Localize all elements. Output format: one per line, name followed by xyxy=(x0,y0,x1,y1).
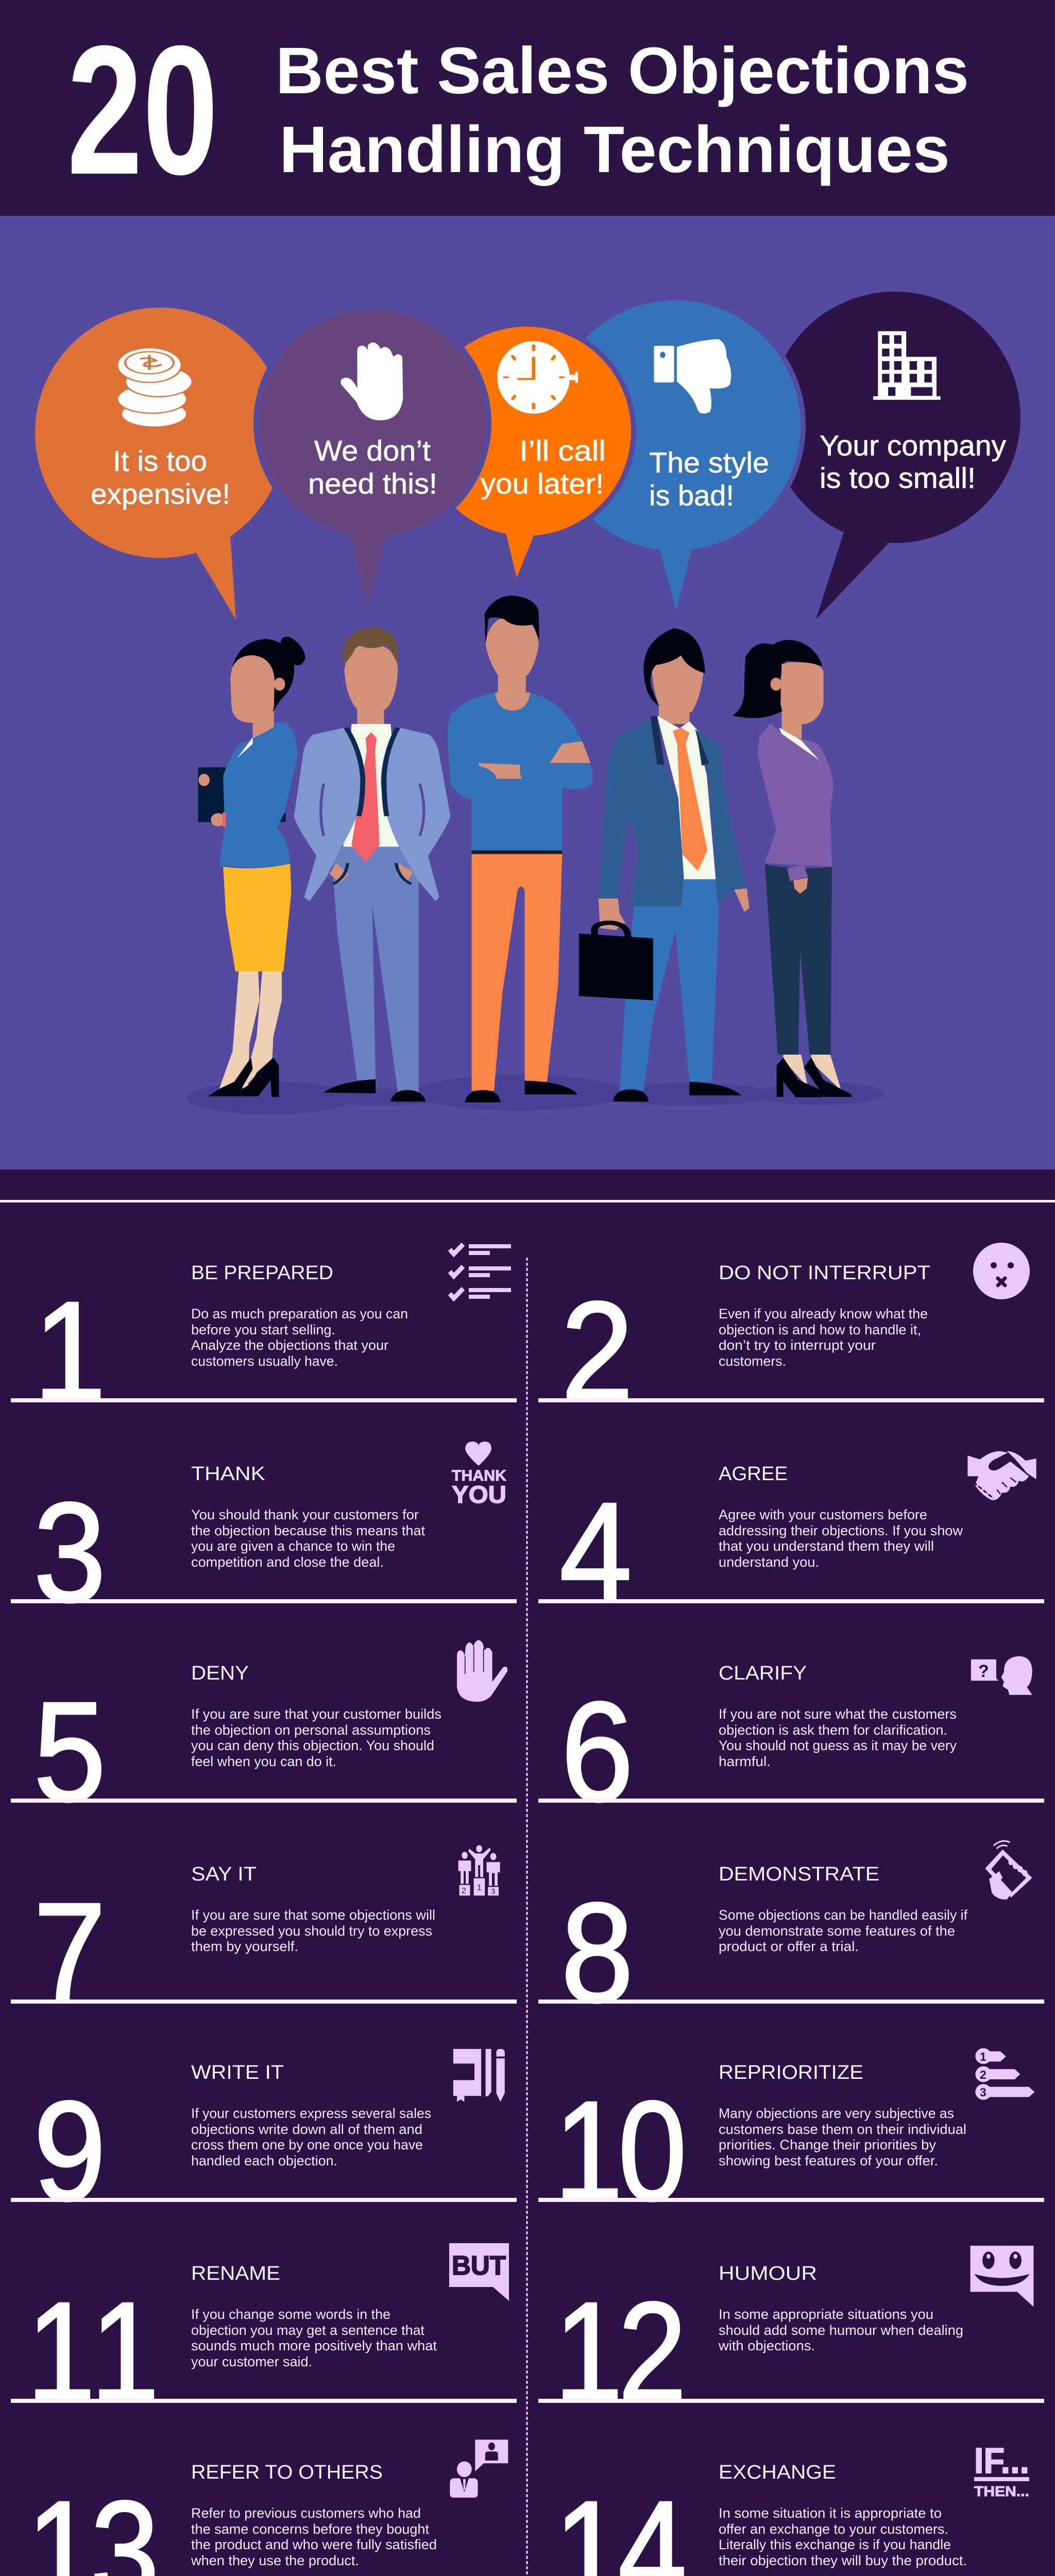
bubble text: you later! xyxy=(481,467,604,500)
icon: handshake xyxy=(967,1451,1036,1500)
body text: them by yourself. xyxy=(191,1939,298,1954)
bubble text: Your company xyxy=(820,429,1006,462)
heading: DO NOT INTERRUPT xyxy=(719,1262,930,1284)
icon: person with speech bubble xyxy=(450,2439,508,2498)
bubble text: We don’t xyxy=(314,434,431,467)
number 7: 7 xyxy=(33,1873,106,2031)
heading: DEMONSTRATE xyxy=(719,1863,879,1885)
body text xyxy=(719,1507,963,1570)
body text: Analyze the objections that your xyxy=(191,1337,388,1353)
icon: podium people: 2 xyxy=(462,1887,466,1895)
body text xyxy=(719,2505,967,2568)
body text: you can deny this objection. You should xyxy=(191,1738,434,1753)
body text: If you are sure that some objections will xyxy=(191,1907,435,1923)
body text: you demonstrate some features of the xyxy=(719,1923,955,1939)
number 1: 1 xyxy=(33,1272,106,1430)
item 2: do not interrupt xyxy=(538,1243,1044,1430)
number 11: 11 xyxy=(27,2273,159,2431)
icon: heart thank you xyxy=(452,1442,506,1508)
body text: your customer said. xyxy=(191,2354,312,2369)
body text: handled each objection. xyxy=(191,2153,337,2168)
body text: objection is ask them for clarification. xyxy=(719,1722,947,1738)
body text: If your customers express several sales xyxy=(191,2106,431,2121)
body text: should add some humour when dealing xyxy=(719,2323,963,2338)
body text: harmful. xyxy=(719,1754,771,1769)
icon: smiling speech bubble xyxy=(971,2246,1033,2307)
bubble text: expensive! xyxy=(91,478,230,510)
body text: If you change some words in the xyxy=(191,2307,390,2322)
item 6: clarify xyxy=(538,1656,1044,1831)
bubble: we don't need this xyxy=(253,304,491,606)
bubble text xyxy=(481,434,606,500)
icon: if then: IF... xyxy=(974,2441,1029,2481)
heading: HUMOUR xyxy=(719,2263,817,2284)
bubble: I'll call you later xyxy=(417,321,636,578)
body text: Literally this exchange is if you handle xyxy=(719,2537,951,2552)
body text xyxy=(191,2505,437,2568)
body text: offer an exchange to your customers. xyxy=(719,2521,948,2537)
body text: Many objections are very subjective as xyxy=(719,2106,954,2121)
number 5: 5 xyxy=(33,1672,106,1831)
number 9: 9 xyxy=(33,2072,106,2230)
item 1: be prepared xyxy=(11,1244,517,1430)
body text: addressing their objections. If you show xyxy=(719,1523,963,1538)
icon: ranked list: 3 xyxy=(980,2086,986,2099)
item 14: exchange xyxy=(538,2441,1044,2576)
person: man in light blue suit and red tie xyxy=(294,628,450,1101)
body text xyxy=(719,1706,957,1769)
icon: silent face xyxy=(973,1243,1030,1299)
icon: but speech bubble xyxy=(449,2243,509,2301)
icon: if then xyxy=(974,2441,1029,2499)
bubble text xyxy=(820,429,1006,494)
body text: the objection on personal assumptions xyxy=(191,1722,431,1738)
number 8: 8 xyxy=(561,1873,634,2031)
body text: the product and who were fully satisfied xyxy=(191,2537,437,2552)
icon: but speech bubble: BUT xyxy=(452,2251,506,2281)
body text: Agree with your customers before xyxy=(719,1507,927,1522)
body text: customers. xyxy=(719,1353,786,1369)
person: man in blue sweater and orange trousers xyxy=(448,596,592,1103)
bubble text: It is too xyxy=(113,445,207,477)
person: man in dark suit with orange tie and briefcase xyxy=(579,628,749,1101)
number 3: 3 xyxy=(33,1473,106,1631)
heading: WRITE IT xyxy=(191,2062,284,2083)
body text: Refer to previous customers who had xyxy=(191,2505,421,2521)
body text: In some appropriate situations you xyxy=(719,2307,933,2322)
item 8: demonstrate xyxy=(538,1841,1044,2031)
body text xyxy=(191,1907,435,1954)
body text: that you understand them they will xyxy=(719,1538,934,1554)
icon: if then: THEN... xyxy=(974,2483,1029,2499)
heading: DENY xyxy=(191,1663,249,1684)
person: woman in purple top xyxy=(733,640,852,1097)
body text: understand you. xyxy=(719,1554,819,1570)
body text: You should thank your customers for xyxy=(191,1507,419,1522)
body text: objection is and how to handle it, xyxy=(719,1322,921,1337)
body text: Some objections can be handled easily if xyxy=(719,1907,967,1923)
body text: before you start selling. xyxy=(191,1322,335,1337)
body text: with objections. xyxy=(718,2338,815,2353)
bubble text xyxy=(91,445,230,510)
bubble: the style is bad xyxy=(545,295,806,611)
heading: RENAME xyxy=(191,2263,280,2284)
icon: question and head xyxy=(971,1656,1032,1695)
body text: don’t try to interrupt your xyxy=(719,1337,876,1353)
number 4: 4 xyxy=(559,1473,632,1631)
body text: You should not guess as it may be very xyxy=(719,1738,957,1753)
bubble: your company is too small xyxy=(769,292,1020,619)
heading: EXCHANGE xyxy=(719,2462,836,2483)
item 11: rename xyxy=(11,2243,517,2431)
body text: showing best features of your offer. xyxy=(719,2153,938,2168)
body text: cross them one by one once you have xyxy=(191,2137,423,2153)
body text: priorities. Change their priorities by xyxy=(719,2137,936,2153)
heading: THANK xyxy=(191,1463,265,1485)
top divider rule xyxy=(0,1200,1055,1202)
body text xyxy=(191,1706,441,1769)
dashed column divider xyxy=(526,1258,528,2576)
body text xyxy=(191,2307,437,2369)
body text: the objection because this means that xyxy=(191,1523,425,1538)
illustration: five business people xyxy=(187,596,885,1114)
icon: notebook and pencil xyxy=(453,2049,505,2102)
icon: phone in hand xyxy=(985,1841,1032,1900)
icon: clock xyxy=(497,341,578,414)
body text: customers base them on their individual xyxy=(719,2122,966,2137)
body text: their objection they will buy the product. xyxy=(719,2553,967,2568)
body text: Do as much preparation as you can xyxy=(191,1306,408,1321)
icon: question and head: ? xyxy=(978,1662,989,1681)
item 5: deny xyxy=(11,1640,517,1831)
heading: BE PREPARED xyxy=(191,1262,333,1284)
icon: stop hand xyxy=(457,1640,507,1702)
heading: AGREE xyxy=(719,1463,788,1485)
body text: objection you may get a sentence that xyxy=(191,2323,424,2338)
body text: competition and close the deal. xyxy=(191,1554,384,1570)
body text: be expressed you should try to express xyxy=(191,1923,432,1939)
number 12: 12 xyxy=(554,2273,687,2431)
number 6: 6 xyxy=(561,1672,634,1831)
icon: building xyxy=(873,331,941,400)
body text: the same concerns before they bought xyxy=(191,2521,429,2537)
body text: sounds much more positively than what xyxy=(191,2338,437,2353)
icon: podium people: 3 xyxy=(491,1887,495,1896)
body text xyxy=(719,1306,928,1369)
icon: coins xyxy=(117,348,193,427)
item 7: say it xyxy=(11,1845,517,2031)
title: Best Sales Objections xyxy=(276,34,969,108)
body text: Even if you already know what the xyxy=(719,1306,928,1321)
heading: REFER TO OTHERS xyxy=(191,2462,383,2483)
bubble text xyxy=(649,446,769,512)
header band xyxy=(0,0,1055,216)
body text: feel when you can do it. xyxy=(191,1754,336,1769)
icon: raised hand xyxy=(341,343,403,420)
item 3: thank xyxy=(11,1442,517,1631)
body text: customers usually have. xyxy=(191,1353,338,1369)
bubble: it is too expensive xyxy=(35,308,285,620)
body text: objections write down all of them and xyxy=(191,2122,422,2137)
body text: you are given a chance to win the xyxy=(191,1538,395,1554)
number 10: 10 xyxy=(554,2072,687,2230)
heading: CLARIFY xyxy=(719,1663,807,1684)
big number 20: 20 xyxy=(67,7,218,213)
body text xyxy=(719,1907,967,1954)
icon: ranked list: 1 xyxy=(980,2050,986,2063)
icon: ranked list: 2 xyxy=(980,2068,986,2081)
body text: In some situation it is appropriate to xyxy=(719,2505,942,2521)
bubble text: need this! xyxy=(308,467,437,500)
icon: ranked list xyxy=(975,2048,1034,2100)
icon: checklist xyxy=(450,1244,511,1299)
heading: REPRIORITIZE xyxy=(719,2062,863,2083)
ground shadows xyxy=(187,1075,885,1114)
bubble text: I’ll call xyxy=(519,434,606,467)
item 4: agree xyxy=(538,1451,1044,1631)
icon: heart thank you: THANK xyxy=(452,1467,506,1484)
item 10: reprioritize xyxy=(538,2048,1044,2230)
icon: thumb down xyxy=(654,339,731,414)
icon: podium people xyxy=(458,1845,500,1896)
body text: product or offer a trial. xyxy=(719,1939,859,1954)
body text xyxy=(719,2106,966,2168)
icon: heart thank you: YOU xyxy=(452,1481,506,1508)
title xyxy=(276,34,969,187)
body text xyxy=(718,2307,963,2353)
body text: If you are not sure what the customers xyxy=(719,1706,957,1722)
bubble text: The style xyxy=(649,446,769,479)
body text xyxy=(191,1507,425,1570)
hero panel with speech bubbles and people xyxy=(0,216,1055,1170)
body text xyxy=(191,1306,408,1369)
bubble text: is too small! xyxy=(820,462,976,494)
body text: when they use the product. xyxy=(191,2553,359,2568)
person: woman in blue top and yellow skirt xyxy=(198,637,305,1097)
item 13: refer to others xyxy=(11,2439,517,2576)
body text xyxy=(191,2106,431,2168)
bubble text: is bad! xyxy=(649,479,734,512)
icon: podium people: 1 xyxy=(477,1884,482,1892)
body text: If you are sure that your customer builds xyxy=(191,1706,441,1722)
heading: SAY IT xyxy=(191,1863,257,1885)
item 12: humour xyxy=(538,2246,1044,2431)
number 2: 2 xyxy=(561,1272,634,1430)
item 9: write it xyxy=(11,2049,517,2230)
bubble text xyxy=(308,434,437,500)
title: Handling Techniques xyxy=(279,113,950,187)
